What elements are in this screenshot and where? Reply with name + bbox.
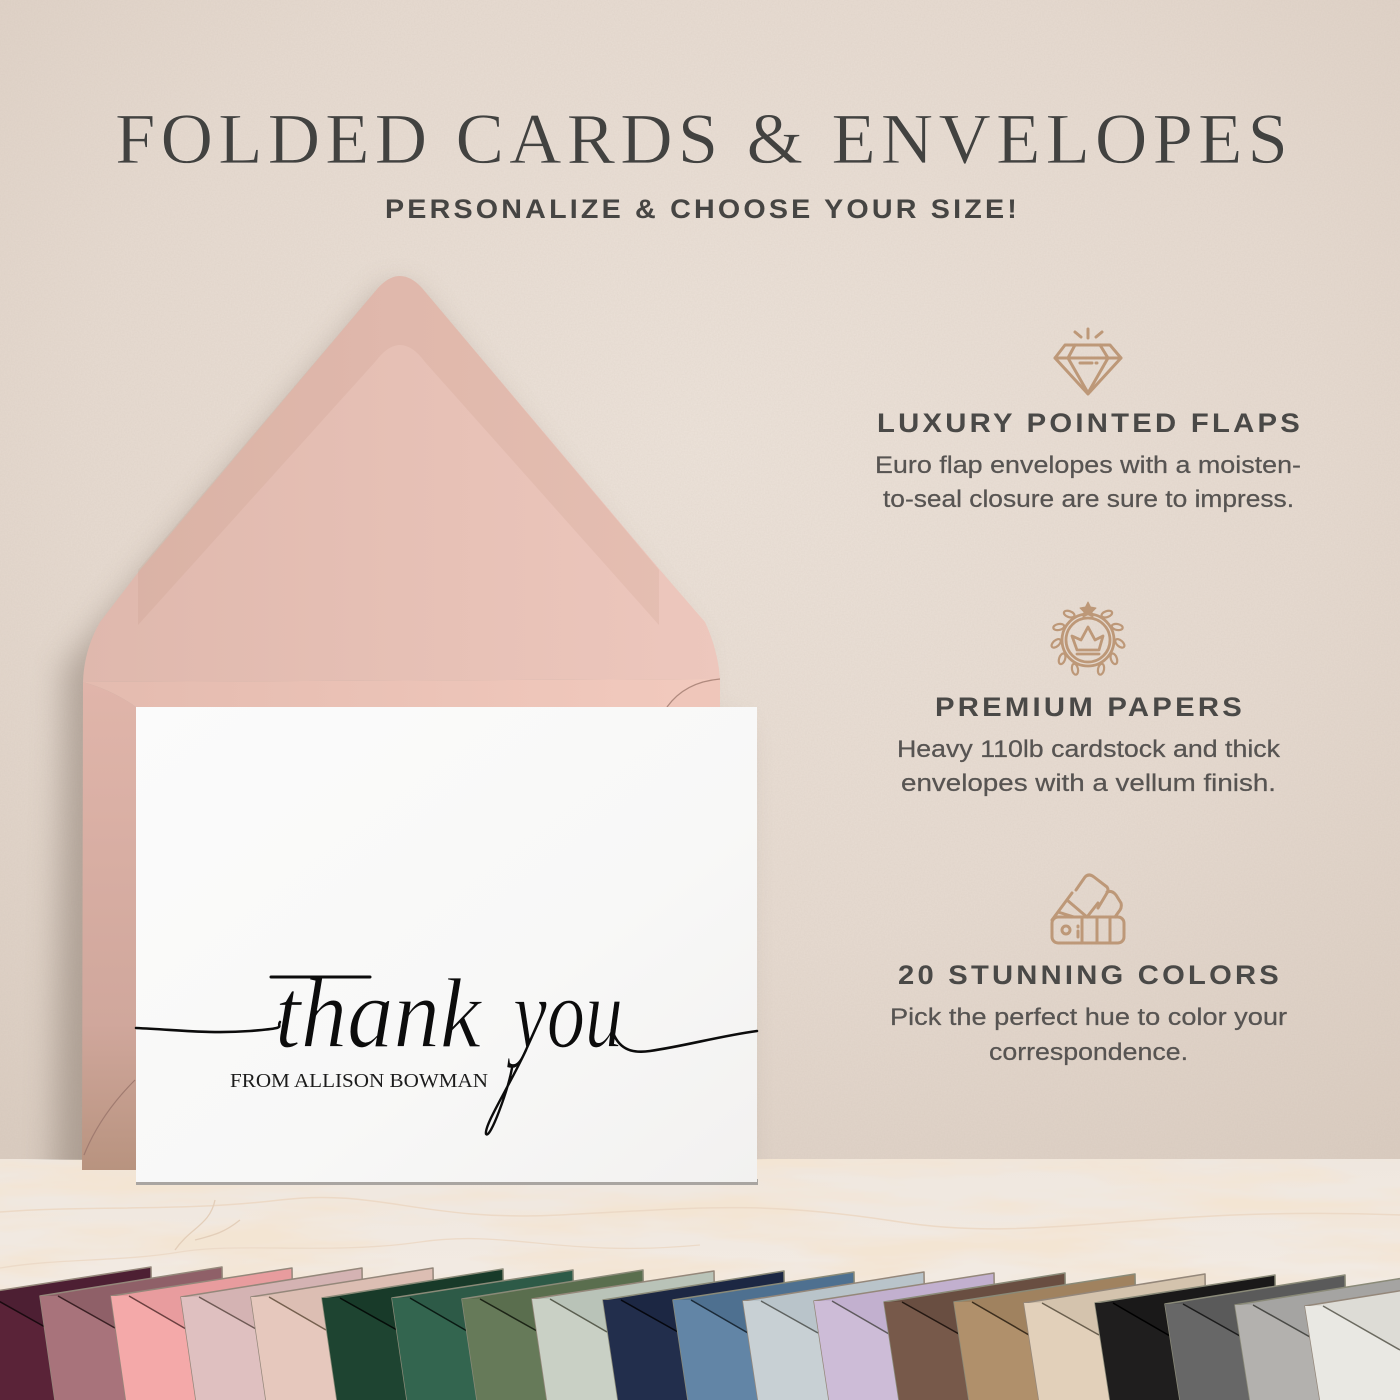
envelope 20 white [1305, 1277, 1400, 1400]
flap liner band [138, 276, 659, 625]
envelope 16 cream [1024, 1274, 1207, 1400]
envelope left side [82, 682, 136, 1170]
pointed flap [83, 276, 720, 682]
envelope 9 pale sage [532, 1271, 716, 1400]
description: to-seal closure are sure to impress. [883, 486, 1294, 513]
heading: PREMIUM PAPERS [935, 692, 1245, 722]
envelope 10 navy [603, 1271, 786, 1400]
description [897, 736, 1281, 797]
description: Euro flap envelopes with a moisten- [875, 452, 1301, 479]
envelope 6 forest [322, 1269, 505, 1400]
envelope and card shadow on wall [54, 288, 739, 1198]
envelope 5 nude [251, 1268, 435, 1400]
envelope bottom left fold [84, 1080, 135, 1155]
envelope 15 tan [954, 1274, 1137, 1400]
envelope 19 silver [1235, 1276, 1400, 1400]
feature: premium papers [897, 602, 1281, 797]
description: Pick the perfect hue to color your [890, 1004, 1287, 1031]
description: envelopes with a vellum finish. [901, 770, 1276, 797]
icon: crown seal [1050, 602, 1126, 675]
envelope 8 sage [462, 1270, 645, 1400]
envelope 2 rose [40, 1267, 224, 1400]
description [890, 1004, 1287, 1066]
subtitle: PERSONALIZE & CHOOSE YOUR SIZE! [385, 194, 1020, 224]
envelope 4 blush [181, 1268, 364, 1400]
heading: 20 STUNNING COLORS [898, 960, 1282, 990]
description [875, 452, 1301, 513]
right flap curl [667, 679, 720, 707]
description: Heavy 110lb cardstock and thick [897, 736, 1281, 763]
sender name: FROM ALLISON BOWMAN [230, 1070, 488, 1092]
feature: luxury pointed flaps [875, 329, 1303, 513]
envelope 7 emerald [392, 1270, 575, 1400]
envelope 11 dusty blue [673, 1272, 856, 1400]
t crossbar flourish [271, 976, 370, 978]
envelope 3 pink [111, 1268, 294, 1400]
title: FOLDED CARDS & ENVELOPES [115, 99, 1293, 179]
icon: colour swatch fan [1052, 875, 1124, 943]
envelope 1 maroon [0, 1267, 153, 1400]
envelope 12 ice [743, 1272, 926, 1400]
envelope 17 black [1095, 1275, 1277, 1400]
descender flourish [486, 1050, 526, 1134]
folded card [136, 707, 758, 1185]
envelope 18 charcoal [1165, 1275, 1347, 1400]
description: correspondence. [989, 1039, 1188, 1066]
card shadow [136, 1179, 758, 1185]
icon: diamond [1055, 329, 1121, 394]
envelope 14 mocha [884, 1273, 1067, 1400]
script greeting: thank [275, 958, 482, 1069]
heading: LUXURY POINTED FLAPS [877, 408, 1303, 438]
marble shelf [0, 1159, 1400, 1400]
envelope throat [83, 679, 720, 707]
right swash [612, 1030, 757, 1052]
pink envelope [82, 276, 720, 1170]
feature: 20 stunning colors [890, 875, 1287, 1066]
envelope colour row [0, 1267, 1400, 1400]
script greeting second word: you [506, 958, 623, 1069]
left swash [136, 1022, 280, 1032]
card face [136, 707, 757, 1182]
envelope 13 lilac [814, 1273, 996, 1400]
